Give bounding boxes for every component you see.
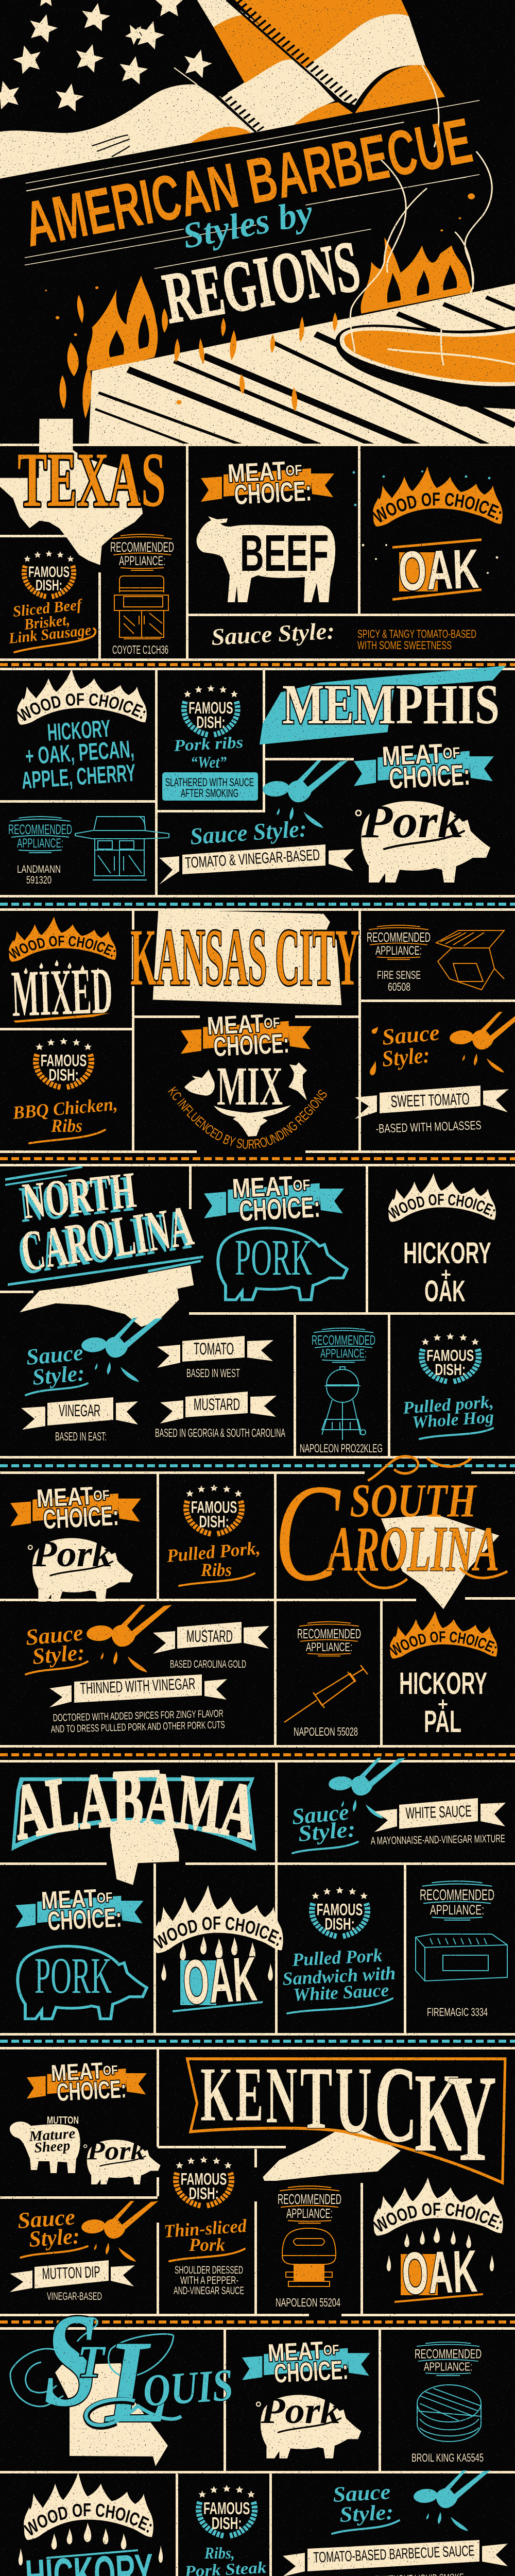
sauce style label: Sauce Style: <box>211 617 335 650</box>
heading: Kentucky with frame: C <box>375 2044 417 2165</box>
section: Kansas City <box>0 911 515 1166</box>
wood of choice flame banner: WOOD OF CHOICE: <box>389 1631 497 1656</box>
mustard ribbon: MUSTARD <box>186 1627 233 1646</box>
sauce style label: Sauce <box>291 1799 350 1829</box>
famous dish badge: FAMOUS <box>28 564 70 581</box>
famous dish text: Ribs <box>200 1560 232 1580</box>
famous dish text <box>402 1393 494 1439</box>
sauce description <box>51 1708 225 1735</box>
right flames <box>361 193 475 314</box>
sauce style label <box>332 2480 399 2534</box>
appliance name: COYOTE C1CH36 <box>112 643 168 656</box>
icon: pig head <box>184 1070 215 1096</box>
vinegar ribbon <box>49 1674 227 1707</box>
grill <box>89 284 515 453</box>
map: Tennessee <box>260 666 506 744</box>
meat of choice banner <box>181 1010 312 1062</box>
famous dish badge <box>176 2156 232 2206</box>
meat of choice banner <box>27 2057 147 2107</box>
famous dish badge: DISH: <box>435 1360 466 1379</box>
famous dish badge: FAMOUS <box>317 1900 363 1919</box>
famous dish badge: DISH: <box>48 1065 79 1084</box>
wood value list: + <box>438 1693 448 1715</box>
section: Alabama <box>0 1758 515 2049</box>
famous dish text <box>183 2544 267 2576</box>
wood of choice flame banner: WOOD OF CHOICE: <box>24 2503 152 2536</box>
icon: basting mop <box>86 1605 172 1672</box>
flame droplets <box>161 1936 273 1980</box>
vinegar ribbon <box>21 1397 138 1430</box>
mix label with animal heads <box>168 1056 327 1149</box>
meat of choice banner: MEAT <box>207 1010 264 1040</box>
famous dish badge: FAMOUS <box>41 1051 87 1070</box>
mustard description: BASED IN GEORGIA & SOUTH CAROLINA <box>155 1426 285 1439</box>
famous dish text: White Sauce <box>293 1979 389 2005</box>
wood of choice flame banner <box>22 2472 156 2540</box>
recommended appliance label <box>297 1622 361 1656</box>
famous dish badge: FAMOUS <box>191 1498 237 1516</box>
sauce style label: Sauce <box>381 1020 440 1050</box>
meat of choice banner: MEAT <box>231 1171 294 1204</box>
appliance name: 60508 <box>388 980 410 993</box>
section: North Carolina <box>0 1161 515 1467</box>
wood value: oak <box>394 2238 483 2307</box>
recommended appliance label: RECOMMENDED <box>312 1333 375 1348</box>
smoke <box>350 65 492 365</box>
wood of choice flame banner <box>17 670 147 725</box>
heading: Kentucky with frame: K <box>200 2052 233 2138</box>
recommended appliance label: RECOMMENDED <box>367 930 431 945</box>
sauce style label <box>25 1620 88 1674</box>
famous dish badge: DISH: <box>324 1914 355 1933</box>
heading: Kentucky with frame: Y <box>448 2050 496 2188</box>
meat of choice banner: CHOICE: <box>42 1501 119 1535</box>
meat of choice banner: OF <box>442 744 460 762</box>
tomato ribbon: TOMATO <box>194 1340 234 1358</box>
icon: Landmann grill <box>75 817 169 880</box>
famous dish text <box>165 1537 261 1586</box>
meat of choice banner: OF <box>285 462 302 479</box>
famous dish text: Thin-sliced <box>163 2215 248 2242</box>
mutton dip ribbon <box>10 2260 135 2292</box>
meat of choice banner: OF <box>263 1014 280 1031</box>
pig with Pork label <box>28 1533 133 1602</box>
sauce ribbon <box>355 1086 509 1119</box>
sauce style label: Style: <box>381 1042 431 1072</box>
pig outline with Pork label: PORK <box>35 1947 112 2004</box>
pig outline with Pork label <box>218 1228 347 1300</box>
meat of choice banner <box>201 456 334 511</box>
icon: longhorn skull <box>214 1105 291 1137</box>
sauce description: DOCTORED WITH ADDED SPICES FOR ZINGY FLAVOR <box>53 1708 224 1724</box>
wood of choice flame banner: WOOD OF CHOICE: <box>17 693 146 721</box>
famous dish text: Sandwich with <box>282 1963 396 1989</box>
heading: South Carolina: C <box>274 1455 341 1611</box>
appliance name: NAPOLEON PRO22KLEG <box>300 1442 383 1455</box>
heading: Kentucky with frame: K <box>415 2050 462 2176</box>
wood value: hickory <box>24 2544 155 2576</box>
meat of choice banner <box>354 738 494 795</box>
famous dish badge <box>186 1484 242 1534</box>
wood value: oak: OAK <box>181 1944 259 2018</box>
sauce description: VINEGAR-BASED <box>47 2291 102 2302</box>
heading: St Louis: S <box>44 2286 98 2434</box>
famous dish badge <box>36 1038 92 1087</box>
meat of choice banner: OF <box>293 1176 311 1194</box>
sauce style label: Style: <box>31 1360 85 1390</box>
recommended appliance label <box>420 1881 494 1920</box>
icon: rooster <box>288 1062 307 1100</box>
sheep with label <box>10 2122 80 2173</box>
famous dish description: WITH A PEPPER- <box>180 2275 238 2286</box>
white sauce ribbon: WHITE SAUCE <box>405 1802 472 1822</box>
recommended appliance label: APPLIANCE: <box>17 836 63 851</box>
famous dish text: Pork ribs <box>173 733 244 755</box>
mutton label: MUTTON <box>47 2115 79 2126</box>
famous dish text: Pulled Pork <box>291 1945 383 1970</box>
appliance name <box>17 863 61 886</box>
recommended appliance label <box>278 2186 341 2223</box>
recommended appliance label <box>8 817 72 853</box>
map: Kansas <box>153 909 341 1005</box>
wood of choice flame banner: WOOD OF CHOICE: <box>153 1917 282 1948</box>
appliance name: FIRE SENSE <box>377 969 421 981</box>
wood value: oak <box>173 1944 263 2018</box>
sauce ribbon: TOMATO & VINEGAR-BASED <box>184 846 320 872</box>
pig with Pork label: Pork <box>32 1533 112 1574</box>
meat of choice banner: OF <box>96 1889 113 1906</box>
meat of choice banner: MEAT <box>227 456 286 488</box>
mustard ribbon: MUSTARD <box>194 1395 240 1414</box>
meat of choice banner <box>204 1171 344 1228</box>
famous dish text: Pork <box>188 2234 225 2255</box>
recommended appliance label <box>110 534 174 570</box>
teal ticket note: AFTER SMOKING <box>181 787 238 800</box>
wood value list: + OAK, PECAN, <box>24 735 135 770</box>
sauce style label <box>16 2204 88 2258</box>
wood of choice flame banner: WOOD OF CHOICE: <box>373 493 502 522</box>
recommended appliance label: APPLIANCE: <box>320 1347 367 1361</box>
recommended appliance label: RECOMMENDED <box>110 539 174 555</box>
sauce style label <box>381 1020 440 1072</box>
recommended appliance label: RECOMMENDED <box>8 822 72 837</box>
sauce description: AND TO DRESS PULLED PORK AND OTHER PORK CUTS <box>51 1719 225 1735</box>
famous dish text <box>11 1093 118 1143</box>
heading: Kentucky with frame: T <box>300 2049 332 2148</box>
sauce drops <box>369 1025 380 1076</box>
meat of choice banner: CHOICE: <box>233 476 312 511</box>
meat of choice banner: OF <box>102 2063 118 2078</box>
recommended appliance label: APPLIANCE: <box>306 1640 352 1654</box>
map and heading: Alabama <box>11 1770 256 1885</box>
recommended appliance label: APPLIANCE: <box>424 2361 472 2374</box>
famous dish text <box>282 1945 396 2013</box>
heading: Texas: TEXAS <box>18 436 166 523</box>
famous dish text: Sliced Beef <box>12 596 84 620</box>
heading: St Louis: OUIS <box>142 2360 235 2416</box>
famous dish badge <box>24 550 74 597</box>
pig outline with Pork label: PORK <box>235 1229 312 1286</box>
flag stars <box>0 0 215 113</box>
famous dish badge <box>184 685 238 735</box>
recommended appliance label: APPLIANCE: <box>375 944 422 958</box>
wood value list: PAL <box>424 1704 461 1739</box>
pig with Pork label: Pork <box>87 2137 145 2165</box>
sauce description <box>357 628 476 652</box>
map: Missouri <box>55 2363 168 2466</box>
influence arc caption <box>167 1090 331 1149</box>
heading: Kentucky with frame: U <box>335 2048 372 2153</box>
recommended appliance label: APPLIANCE: <box>286 2207 333 2221</box>
famous dish text: Ribs <box>50 1115 82 1136</box>
heading: Kentucky with frame <box>187 2044 505 2188</box>
wood value: oak <box>352 470 499 602</box>
map: South Carolina <box>381 1515 499 1609</box>
sauce style label: Sauce <box>25 1620 84 1650</box>
famous dish description <box>174 2264 244 2297</box>
mutton dip ribbon: MUTTON DIP <box>42 2263 100 2283</box>
heading: St Louis <box>10 2286 235 2447</box>
famous dish badge: DISH: <box>196 713 225 732</box>
heading: North Carolina: NORTH <box>20 1161 139 1230</box>
famous dish text <box>163 2215 248 2261</box>
recommended appliance label <box>367 925 431 959</box>
meat of choice banner: CHOICE: <box>388 759 471 795</box>
famous dish badge <box>421 1333 479 1382</box>
sauce style label: Sauce Style: <box>189 815 307 850</box>
icon: basting mop <box>413 2470 490 2531</box>
famous dish badge: DISH: <box>199 1512 229 1531</box>
pig outline with Pork label <box>18 1946 147 2019</box>
section: Memphis <box>0 666 515 911</box>
famous dish badge: FAMOUS <box>203 2500 250 2518</box>
wood value list: OAK <box>424 1275 466 1308</box>
wood of choice flame banner <box>389 1611 497 1659</box>
wood of choice flame banner <box>388 1173 496 1222</box>
famous dish badge: DISH: <box>212 2514 242 2533</box>
section: St Louis <box>0 2286 515 2576</box>
wood of choice flame banner: WOOD OF CHOICE: <box>388 1194 495 1219</box>
meat of choice banner: MEAT <box>267 2337 324 2367</box>
map: Texas <box>0 419 143 565</box>
famous dish description: AND-VINEGAR SAUCE <box>174 2285 244 2297</box>
icon: Coyote grill <box>114 576 168 639</box>
icon: kettle grill <box>322 1367 366 1440</box>
American flag <box>0 0 445 179</box>
meat of choice banner <box>15 1885 144 1936</box>
map and heading: Alabama: ALABAMA <box>17 1773 252 1841</box>
meat of choice banner: CHOICE: <box>273 2354 349 2388</box>
section: South Carolina <box>0 1455 515 1762</box>
flame droplets <box>387 2227 494 2271</box>
wood of choice flame banner: WOOD OF CHOICE: <box>373 2203 502 2232</box>
heading: South Carolina: SOUTH <box>350 1475 477 1527</box>
cow with Beef label: BEEF <box>240 524 329 582</box>
famous dish badge: FAMOUS <box>426 1346 474 1364</box>
icon: smoker box <box>416 1934 507 1981</box>
mustard ribbon <box>160 1392 277 1423</box>
pig with Pork label <box>256 2390 361 2459</box>
heading: South Carolina <box>274 1455 507 1611</box>
wood of choice flame banner <box>8 917 116 962</box>
sauce style label <box>291 1799 358 1853</box>
map: Kentucky <box>263 2130 401 2181</box>
mix label with animal heads: KC INFLUENCED BY SURROUNDING REGIONS <box>168 1086 327 1149</box>
white sauce ribbon <box>374 1798 506 1832</box>
vinegar description: BASED IN EAST: <box>55 1430 107 1443</box>
sauce style label: Sauce <box>25 1340 84 1370</box>
sheep with label: Sheep <box>33 2138 71 2156</box>
wood value list: APPLE, CHERRY <box>21 759 136 794</box>
famous dish badge <box>312 1887 368 1936</box>
mix label with animal heads: MIX <box>217 1056 283 1117</box>
appliance name: NAPOLEON 55204 <box>276 2296 340 2309</box>
famous dish badge: DISH: <box>188 2184 219 2202</box>
sauce description: WITH SOME SWEETNESS <box>357 639 452 652</box>
wood value list <box>21 715 136 794</box>
sauce style label: Style: <box>339 2501 394 2527</box>
wood value list <box>403 1236 491 1308</box>
wood value list: HICKORY <box>46 715 111 746</box>
heading: North Carolina: CAROLINA <box>17 1194 197 1284</box>
meat of choice banner: OF <box>323 2342 339 2358</box>
wood value list: + <box>441 1264 451 1285</box>
meat of choice banner: MEAT <box>50 2057 104 2086</box>
section: Kentucky <box>0 2044 515 2330</box>
famous dish badge: FAMOUS <box>181 2170 227 2188</box>
teal ticket note: SLATHERED WITH SAUCE <box>165 776 254 789</box>
pig with Pork label <box>356 795 490 883</box>
appliance name: NAPOLEON 55028 <box>294 1725 358 1738</box>
heading: St Louis: L <box>105 2316 170 2447</box>
famous dish description: SHOULDER DRESSED <box>175 2264 243 2276</box>
section: Kansas City: MIXED <box>10 954 114 1030</box>
meat of choice banner: CHOICE: <box>56 2075 127 2107</box>
icon: meat tenderizer <box>282 2228 336 2286</box>
famous dish text: Ribs, <box>204 2544 235 2562</box>
vinegar ribbon: VINEGAR <box>59 1401 100 1420</box>
recommended appliance label: APPLIANCE: <box>119 554 165 568</box>
heading: Kentucky with frame: N <box>266 2051 298 2140</box>
barbecue sauce ribbon <box>283 2540 508 2576</box>
pig with Pork label: Pork <box>361 795 463 848</box>
wood value: mixed <box>10 954 114 1030</box>
title: Regions: REGIONS <box>158 226 366 339</box>
flame droplets <box>24 960 100 974</box>
famous dish text: BBQ Chicken, <box>11 1093 118 1123</box>
flame droplets <box>19 2522 163 2565</box>
wood value list <box>399 1666 487 1739</box>
icon: basting mop <box>81 2201 158 2262</box>
hero illustration: flag, flames and grill <box>0 0 515 453</box>
famous dish text: Whole Hog <box>411 1408 494 1432</box>
mustard ribbon <box>153 1622 269 1654</box>
recommended appliance label <box>415 2342 482 2376</box>
icon: basting mop <box>81 1318 163 1382</box>
meat of choice banner <box>10 1482 141 1535</box>
sauce style label: Style: <box>31 1639 85 1669</box>
famous dish text: Pulled Pork, <box>165 1537 261 1566</box>
sauce ribbon <box>159 844 354 885</box>
meat of choice banner: MEAT <box>381 738 443 772</box>
meat of choice banner <box>242 2337 370 2388</box>
famous dish text: “Wet” <box>191 753 227 771</box>
icon: round grill grate <box>417 2385 481 2442</box>
sheep with label: Mature <box>28 2126 76 2145</box>
sauce style label <box>25 1340 88 1395</box>
heading: Kentucky with frame: E <box>235 2052 263 2138</box>
icon: basting mop <box>449 1012 515 1073</box>
icon: meat injector <box>284 1665 368 1722</box>
icon: basting mop <box>262 760 348 828</box>
vinegar ribbon: THINNED WITH VINEGAR <box>80 1674 196 1698</box>
wood of choice flame banner <box>370 2177 507 2236</box>
meat of choice banner: CHOICE: <box>238 1191 321 1228</box>
tomato description: BASED IN WEST <box>186 1366 240 1380</box>
meat of choice banner: CHOICE: <box>47 1902 123 1936</box>
recommended appliance label <box>312 1328 375 1362</box>
meat of choice banner: OF <box>93 1487 110 1504</box>
wood of choice flame banner <box>373 466 503 527</box>
meat of choice banner: MEAT <box>36 1482 94 1513</box>
sauce style label: Style: <box>28 2223 80 2252</box>
icon: basting mop <box>328 1758 405 1819</box>
famous dish text: Brisket, <box>23 612 71 633</box>
famous dish text <box>7 596 95 652</box>
heading: St Louis: T <box>77 2337 106 2387</box>
pig with Pork label: Pork <box>260 2390 340 2431</box>
appliance name <box>377 969 421 993</box>
sauce style label: Style: <box>297 1816 356 1846</box>
appliance name: LANDMANN <box>17 863 61 875</box>
famous dish text: Pulled pork, <box>402 1393 494 1418</box>
recommended appliance label: RECOMMENDED <box>278 2191 341 2207</box>
tomato ribbon <box>157 1336 273 1368</box>
wood of choice flame banner: WOOD OF CHOICE: <box>8 936 116 959</box>
mustard description: BASED CAROLINA GOLD <box>170 1658 246 1670</box>
subtitle: Styles by: Styles by <box>179 193 316 257</box>
steak <box>335 325 515 409</box>
cow with Beef label <box>197 516 335 602</box>
meat of choice banner: MEAT <box>41 1885 97 1915</box>
appliance name: 591320 <box>26 874 52 886</box>
wood of choice flame banner <box>153 1885 283 1954</box>
icon: folding grill <box>436 930 504 990</box>
famous dish badge: DISH: <box>36 577 62 594</box>
famous dish badge: FAMOUS <box>188 699 233 717</box>
map: North Carolina <box>20 1265 194 1327</box>
meat of choice banner: CHOICE: <box>213 1028 290 1062</box>
section: Texas <box>0 418 515 670</box>
sauce style label: Sauce <box>332 2480 391 2507</box>
teal ticket note <box>162 772 258 801</box>
pig with Pork label <box>84 2137 161 2184</box>
famous dish text <box>173 733 244 771</box>
heading: North Carolina <box>17 1161 197 1284</box>
sauce style label: Sauce <box>16 2204 76 2233</box>
left flames <box>45 276 168 419</box>
famous dish text: Link Sausage <box>7 621 92 647</box>
recommended appliance label: RECOMMENDED <box>297 1626 361 1641</box>
famous dish badge <box>198 2485 255 2536</box>
